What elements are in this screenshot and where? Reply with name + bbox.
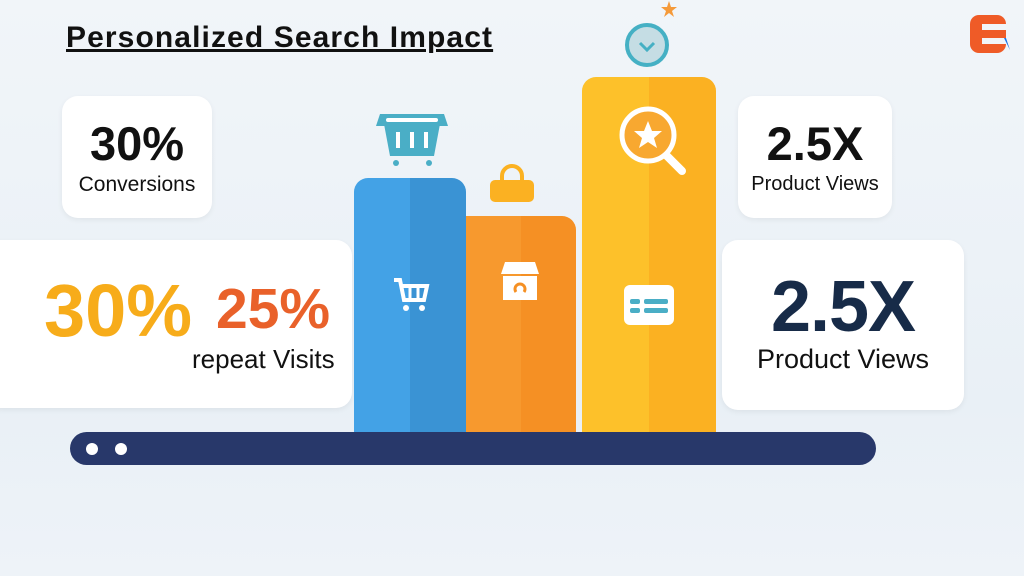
stat 30%: 30%: [44, 269, 192, 352]
title: Personalized Search Impact: [66, 21, 493, 54]
icon: list card: [624, 285, 674, 325]
icon: magnifier star: [620, 106, 686, 175]
bar chart: [354, 1, 716, 432]
icon: star: [661, 1, 677, 17]
card: 30% conversions: Conversions: [79, 173, 195, 196]
icon: shop box: [501, 262, 539, 300]
stat 25%: 25%: [216, 277, 330, 341]
icon: cart: [394, 278, 430, 311]
panel: 2.5X product views big: [722, 240, 964, 410]
logo: [970, 15, 1010, 53]
panel: 2.5X product views big: Product Views: [757, 344, 929, 374]
card: 30% conversions: [62, 96, 212, 218]
orange bar: [466, 216, 576, 433]
card: 2.5X product views small: [738, 96, 892, 218]
icon: check circle: [625, 23, 669, 67]
bottom bar: [70, 432, 876, 465]
label repeat visits: repeat Visits: [192, 344, 335, 374]
panel: repeat visits: [0, 240, 352, 408]
icon: lock bag: [490, 164, 534, 202]
panel: 2.5X product views big: 2.5X: [771, 267, 915, 347]
card: 30% conversions: 30%: [90, 117, 184, 170]
card: 2.5X product views small: 2.5X: [767, 117, 863, 170]
yellow bar: [582, 77, 716, 433]
card: 2.5X product views small: Product Views: [751, 173, 879, 195]
icon: basket: [376, 114, 448, 166]
blue bar: [354, 178, 466, 433]
